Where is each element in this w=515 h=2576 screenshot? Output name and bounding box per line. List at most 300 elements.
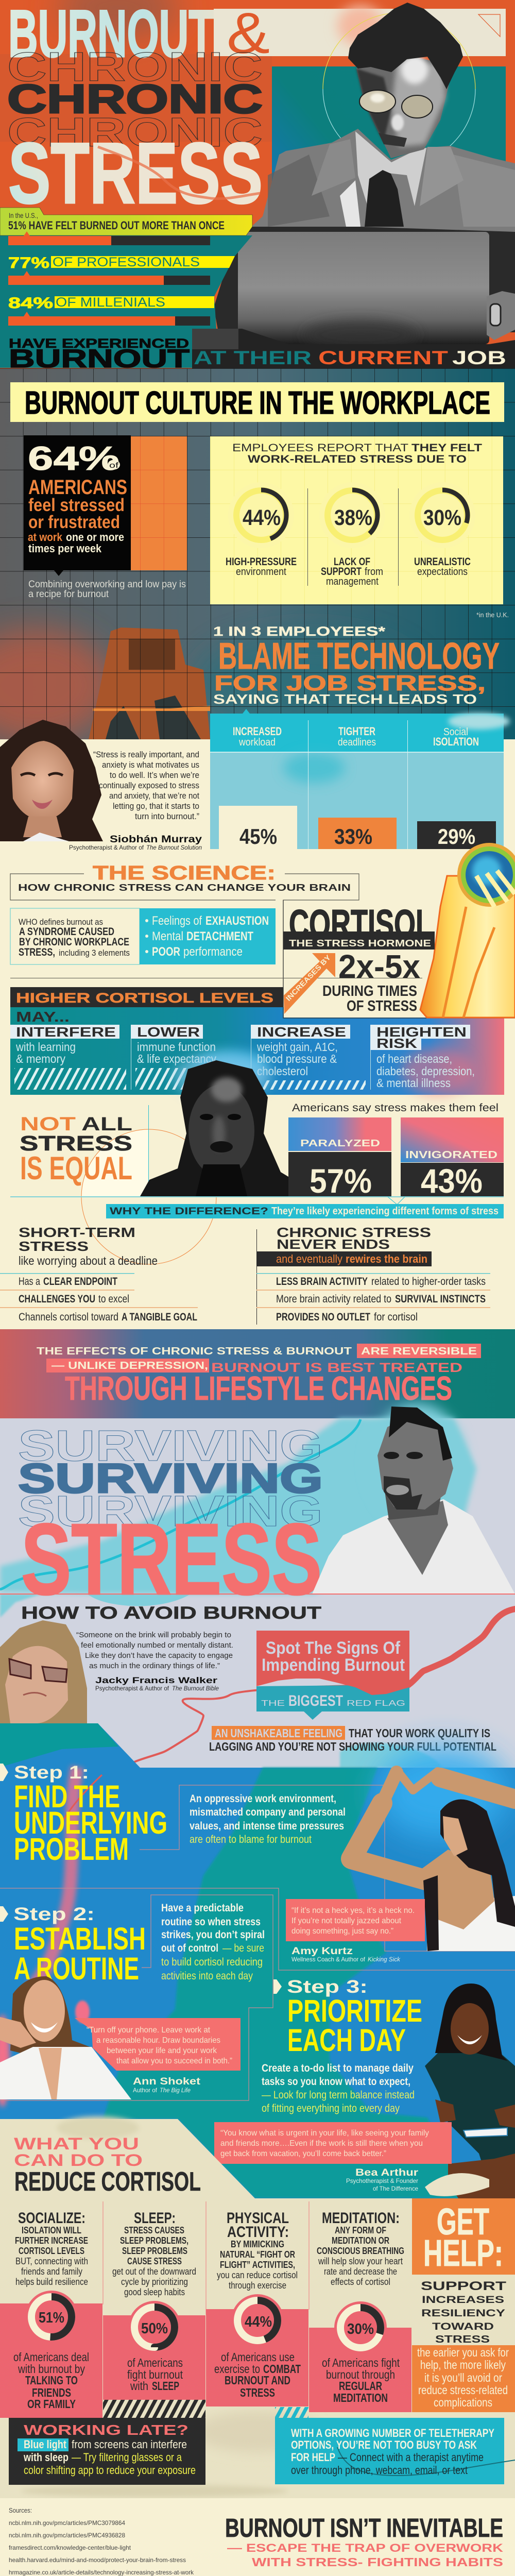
bar 77 percent: [8, 271, 210, 285]
panel: higher cortisol levels: HIGHER CORTISOL LEVELS: [16, 990, 273, 1006]
panel: higher cortisol levels: MAY...: [16, 1009, 70, 1025]
label social isolation: ISOLATION: [433, 735, 479, 748]
column: sleep: STRESS CAUSES: [124, 2225, 184, 2235]
laptop: [238, 232, 489, 344]
panel: steps: [0, 1723, 515, 2198]
shirt: [355, 131, 426, 216]
hair: [348, 3, 463, 89]
label increased workload: workload: [238, 737, 276, 748]
column: sleep: fight burnout: [127, 2368, 183, 2381]
panel: teletherapy: FOR HELP: [291, 2451, 335, 2464]
quote: Ann Shoket: between your life and your work: [107, 2046, 217, 2055]
chronic stress never ends: NEVER ENDS: [277, 1236, 390, 1252]
interfere: INTERFERE: [16, 1024, 116, 1040]
stat invigorated: 43%: [421, 1162, 483, 1200]
label lack of support: LACK OF: [334, 556, 370, 568]
stat tab: [0, 208, 252, 235]
panel: work-related stress: WORK-RELATED STRESS DUE TO: [248, 453, 467, 465]
column: socialize: SOCIALIZE:: [18, 2210, 85, 2227]
label unrealistic: UNREALISTIC: [414, 556, 471, 568]
column: physical activity: ACTIVITY:: [227, 2224, 289, 2241]
photo: Siobhan Murray: [0, 720, 103, 841]
short-term stress: CHALLENGES YOU: [19, 1293, 95, 1305]
column: meditation: will help slow your heart: [318, 2256, 403, 2266]
photo: man with laptop: [214, 3, 515, 350]
column: meditation: burnout through: [326, 2368, 395, 2381]
column: socialize: TALKING TO: [25, 2374, 78, 2387]
column: sleep: good sleep habits: [124, 2287, 185, 2297]
panel: work-related stress: THEY FELT: [411, 442, 482, 454]
closing headline: — ESCAPE THE TRAP OF OVERWORK: [227, 2541, 503, 2554]
during times of stress: OF STRESS: [347, 998, 417, 1014]
quote: Siobhan Murray: letting go, that it starts to: [113, 802, 199, 811]
column: socialize: with burnout by: [18, 2362, 85, 2376]
building reflection: [89, 628, 210, 739]
white strip: [340, 180, 360, 227]
quote: Amy Kurtz: doing something, just say no.”: [291, 1927, 393, 1936]
step 2: [0, 1902, 265, 1986]
during times of stress: [322, 983, 417, 1014]
quote: Siobhan Murray: anxiety is what motivates us: [102, 760, 199, 770]
surviving outline: SURVIVING: [18, 1421, 323, 1470]
at their current job: JOB: [452, 347, 506, 368]
heading: NOT: [20, 1113, 76, 1134]
bullets: performance: [183, 945, 243, 959]
sources list: ncbi.nlm.nih.gov/pmc/articles/PMC3079864: [9, 2519, 125, 2527]
quote: Jacky Francis Walker: [76, 1631, 233, 1692]
bar 29 percent: 29%: [438, 824, 475, 849]
heighten risk: [370, 1024, 475, 1090]
stat 84 percent: [8, 295, 214, 312]
connector lines: [0, 1785, 515, 2100]
label high-pressure: HIGH-PRESSURE: [226, 556, 297, 568]
sources list: ncbi.nlm.nih.gov/pmc/articles/PMC4936828: [9, 2532, 125, 2539]
stress: STRESS: [21, 1503, 322, 1616]
chronic stress never ends: CHRONIC STRESS: [277, 1225, 431, 1240]
teal panel: [272, 66, 506, 195]
column: socialize: CORTISOL LEVELS: [19, 2246, 84, 2256]
lower: & life expectancy: [137, 1052, 216, 1065]
chronic stress never ends: LESS BRAIN ACTIVITY: [276, 1276, 368, 1287]
column: physical activity: PHYSICAL: [227, 2210, 289, 2227]
quote: Jacky Francis Walker: The Burnout Bible: [172, 1685, 219, 1692]
quote: Ann Shoket: Author of: [133, 2087, 158, 2094]
column: sleep: 50%: [141, 2320, 168, 2337]
heighten risk: RISK: [376, 1036, 417, 1051]
quote: Ann Shoket: [75, 2018, 241, 2094]
panel: higher cortisol levels: [10, 987, 504, 1095]
watercolor blobs: [0, 1418, 476, 1594]
panel: hero: [0, 0, 515, 373]
bar 33 percent: [318, 818, 397, 849]
column: get help: TOWARD: [432, 2321, 494, 2332]
panel: 64 percent: of: [109, 461, 119, 470]
quote: Siobhan Murray: “Stress is really important, and: [93, 750, 199, 759]
step 2: A ROUTINE: [14, 1951, 139, 1986]
column: get help: complications: [434, 2396, 492, 2409]
pink rule: [0, 1594, 515, 1595]
circle ornament: [81, 1129, 149, 1197]
column: get help: INCREASES: [422, 2295, 504, 2306]
panel: WHO definition: WHO defines burnout as: [19, 917, 103, 927]
bullets: EXHAUSTION: [205, 914, 269, 928]
bullets: Mental: [152, 929, 183, 943]
section: cream background: [0, 739, 515, 1329]
short-term stress: like worrying about a deadline: [19, 1254, 158, 1267]
stat invigorated: [401, 1117, 504, 1200]
heading: the science: HOW CHRONIC STRESS CAN CHANGE YOUR BRAIN: [18, 883, 351, 893]
panel: effects reversible: ARE REVERSIBLE: [361, 1346, 477, 1357]
quote: Siobhan Murray: [69, 750, 202, 851]
step 1: are often to blame for burnout: [190, 1834, 312, 1845]
step 3: [262, 1977, 422, 2114]
increase: INCREASE: [257, 1024, 346, 1040]
during times of stress: DURING TIMES: [322, 983, 417, 999]
label tighter deadlines: [338, 725, 376, 748]
short-term stress: to excel: [98, 1293, 129, 1305]
bullets: DETACHMENT: [186, 929, 253, 943]
2x-5x: 2x-5x: [338, 948, 420, 985]
step 1: PROBLEM: [14, 1832, 129, 1867]
label high-pressure: [226, 556, 297, 578]
column: get help: [412, 2198, 515, 2412]
chronic stress never ends: for cortisol: [374, 1311, 418, 1323]
step 2: Have a predictable: [161, 1902, 244, 1914]
raised arms: [351, 1770, 515, 1880]
hatch marks: [14, 1068, 126, 1090]
quote: Siobhan Murray: to do well. It’s when we’re: [110, 771, 199, 780]
at their current job: [194, 347, 506, 368]
bullets: POOR: [152, 945, 180, 959]
lower: immune function: [137, 1040, 216, 1054]
column: meditation: MEDITATION: [333, 2391, 388, 2404]
stat paralyzed: 57%: [310, 1162, 372, 1200]
title: chronic outline: CHRONIC: [7, 44, 263, 90]
column: physical activity: exercise to: [214, 2362, 260, 2376]
short-term stress: Channels cortisol toward: [19, 1311, 118, 1323]
step 3: tasks so you know what to expect,: [262, 2076, 410, 2088]
panel: effects reversible: — UNLIKE DEPRESSION,: [52, 1360, 208, 1371]
step 2: out of control: [161, 1942, 218, 1954]
column: sleep: with: [130, 2379, 148, 2393]
quote: Ann Shoket: “Turn off your phone. Leave work at: [87, 2026, 211, 2035]
bar 33 percent: 33%: [334, 824, 372, 849]
panel: effects reversible: BURNOUT IS BEST TREATED: [211, 1361, 462, 1375]
column: meditation: REGULAR: [339, 2379, 382, 2393]
footnote: *in the U.K.: [476, 611, 509, 619]
step 1: UNDERLYING: [14, 1805, 167, 1840]
bar 45 percent: 45%: [239, 824, 277, 849]
callout: biggest red flag: RED FLAG: [347, 1699, 405, 1708]
panel: cortisol hormone: [10, 843, 515, 1018]
stat 77 percent: 77%: [8, 255, 49, 272]
column: physical activity: NATURAL “FIGHT OR: [220, 2249, 295, 2260]
column: socialize: FURTHER INCREASE: [15, 2235, 88, 2246]
panel: working late: Blue light: [24, 2438, 67, 2451]
caption: Combining overworking and low pay is: [28, 579, 186, 590]
stat 84 percent: OF MILLENIALS: [56, 295, 165, 310]
sources list: [8, 2506, 305, 2576]
interfere: [10, 1024, 119, 1065]
column: physical activity: you can reduce cortisol: [217, 2270, 298, 2280]
panel: 64 percent: at work: [28, 531, 63, 544]
quote: Bea Arthur: get back from vacation, you’ll come back better.”: [220, 2149, 386, 2158]
heading: how to avoid: HOW TO AVOID BURNOUT: [21, 1603, 321, 1623]
heading: [20, 1113, 132, 1187]
panel: 64 percent: times per week: [28, 542, 102, 555]
column: get help: SUPPORT: [421, 2279, 506, 2293]
chronic stress never ends: PROVIDES NO OUTLET: [276, 1311, 370, 1323]
heading: blame technology: [213, 624, 500, 707]
label tighter deadlines: deadlines: [338, 737, 376, 748]
short-term stress: Has a: [19, 1276, 40, 1287]
arrow: increases by: INCREASES BY: [284, 953, 333, 1003]
quote: Jacky Francis Walker: Like they don’t have the capacity to engage: [85, 1651, 233, 1660]
face: [443, 1816, 468, 1856]
photo: man in white shirt: [312, 1404, 515, 1594]
column: sleep: CAUSE STRESS: [127, 2256, 182, 2266]
neck and face: [356, 57, 450, 158]
column: socialize: [0, 2210, 102, 2418]
column: meditation: ANY FORM OF: [335, 2225, 386, 2235]
teal rule: [10, 1196, 504, 1197]
panel: effects reversible: THE EFFECTS OF CHRONIC STRESS & BURNOUT: [37, 1346, 352, 1357]
column: sleep: SLEEP PROBLEMS,: [120, 2235, 188, 2246]
column: meditation: 30%: [347, 2321, 374, 2337]
quote: Bea Arthur: and friends more….Even if the work is still there when you: [220, 2139, 423, 2148]
heighten risk: of heart disease,: [376, 1052, 452, 1065]
stats panel background: [0, 235, 252, 368]
column: sleep: get out of the downward: [112, 2266, 196, 2277]
title: chronic outline: CHRONIC: [7, 109, 263, 155]
donut 30: [409, 482, 475, 548]
step 1: mismatched company and personal: [190, 1806, 346, 1818]
quote: Bea Arthur: of The Difference: [373, 2185, 418, 2192]
short-term stress: [0, 1225, 198, 1323]
label lack of support: from: [365, 566, 383, 578]
cortisol word: CORTISOL: [289, 901, 433, 946]
callout: biggest red flag: THE: [261, 1699, 285, 1708]
donut 30: 30%: [423, 505, 461, 530]
sources list: hrmagazine.co.uk/article-details/technology-increasing-stress-at-work: [9, 2569, 194, 2576]
column: socialize: friends and family: [21, 2266, 82, 2277]
photo: Ann Shoket: [0, 1976, 131, 2099]
bar 29 percent: [417, 821, 496, 849]
stat invigorated: INVIGORATED: [405, 1149, 497, 1161]
panel: work-related stress: [210, 436, 503, 604]
increase: weight gain, A1C,: [256, 1040, 338, 1054]
why the difference: WHY THE DIFFERENCE?: [110, 1206, 268, 1217]
column: physical activity: [206, 2210, 308, 2406]
step 2: activities into each day: [161, 1970, 253, 1982]
callout: biggest red flag: [256, 1631, 409, 1720]
panel: WHO definition: [10, 908, 276, 964]
label increased workload: INCREASED: [233, 725, 282, 738]
red flag statement: AN UNSHAKEABLE FEELING: [215, 1726, 342, 1740]
surviving solid: SURVIVING: [18, 1455, 323, 1502]
quote: Amy Kurtz: Kicking Sick: [368, 1956, 401, 1963]
lapels: [312, 139, 355, 196]
column: sleep: cycle by prioritizing: [121, 2277, 188, 2287]
step 1: An oppressive work environment,: [190, 1793, 336, 1805]
heading: CAN DO TO: [14, 2151, 143, 2170]
at their current job: AT THEIR: [194, 347, 312, 368]
column: get help: STRESS: [435, 2334, 490, 2345]
donut 38: 38%: [334, 505, 372, 530]
column: socialize: ISOLATION WILL: [22, 2225, 81, 2235]
column: meditation: [309, 2210, 411, 2412]
grid background: [0, 368, 515, 739]
column: get help: GET: [437, 2201, 489, 2243]
quote: Ann Shoket: that allow you to succeed in both.”: [116, 2057, 232, 2065]
quote: Bea Arthur: “You know what is urgent in your life, like seeing your family: [220, 2129, 429, 2138]
heading: blame technology: SAYING THAT TECH LEADS TO: [213, 691, 477, 707]
quote: Jacky Francis Walker: as much in the ordinary things of life.”: [89, 1662, 220, 1670]
sources list: health.harvard.edu/mind-and-mood/protect-your-brain-from-stress: [9, 2556, 186, 2564]
column: physical activity: through exercise: [229, 2280, 286, 2291]
cream band: [214, 9, 506, 56]
column: socialize: of Americans deal: [13, 2350, 89, 2364]
quote: Amy Kurtz: If you’re not totally jazzed about: [291, 1917, 402, 1925]
short-term stress: SHORT-TERM: [19, 1225, 135, 1240]
chronic stress never ends: related to higher-order tasks: [371, 1276, 486, 1287]
heading: blame technology: FOR JOB STRESS,: [214, 671, 486, 695]
short-term stress: A TANGIBLE GOAL: [122, 1311, 197, 1323]
panel: 64 percent: AMERICANS: [28, 476, 127, 499]
chronic stress never ends: rewires the brain: [346, 1252, 427, 1265]
illustration: brain and hands: [420, 843, 515, 1018]
callout: biggest red flag: BIGGEST: [288, 1692, 343, 1709]
panel: WHO definition: A SYNDROME CAUSED: [19, 926, 114, 938]
donut 38: [319, 482, 385, 548]
quote: Jacky Francis Walker: feel emotionally numbed or mentally distant.: [81, 1641, 233, 1650]
title box: [10, 382, 504, 422]
heading: REDUCE CORTISOL: [14, 2167, 201, 2197]
why the difference: [106, 1197, 504, 1218]
quote: Siobhan Murray: turn into burnout.”: [135, 812, 199, 821]
panel: 64 percent: feel stressed: [28, 495, 125, 515]
panel: not all stress is equal: [0, 1054, 504, 1325]
callout: biggest red flag: Impending Burnout: [262, 1655, 405, 1675]
caption: a recipe for burnout: [28, 589, 109, 600]
title: chronic solid: CHRONIC: [7, 76, 263, 122]
step 1: [0, 1762, 346, 1867]
callout: biggest red flag: Spot The Signs Of: [266, 1638, 401, 1658]
label lack of support: management: [326, 576, 379, 587]
bullets: [145, 914, 269, 959]
heighten risk: HEIGHTEN: [376, 1024, 467, 1040]
stress hormone label: THE STRESS HORMONE: [289, 938, 431, 948]
step 3: of fitting everything into every day: [262, 2103, 400, 2114]
donut 44: [228, 482, 294, 548]
heading: the science: [10, 862, 515, 1018]
column: socialize: FRIENDS: [32, 2386, 71, 2399]
short-term stress: STRESS: [19, 1239, 89, 1254]
step 3: — Look for long term balance instead: [262, 2089, 415, 2101]
panel: surviving stress and avoiding burnout: [0, 1404, 515, 1775]
column: meditation: of Americans fight: [322, 2356, 400, 2369]
title: stress: STRESS: [8, 125, 263, 222]
heading: the science: THE SCIENCE:: [93, 862, 276, 884]
red flag statement: [209, 1726, 496, 1753]
column: socialize: OR FAMILY: [27, 2397, 76, 2411]
chronic stress never ends: and eventually: [276, 1252, 342, 1265]
quote: Bea Arthur: [214, 2122, 452, 2192]
column: physical activity: 44%: [245, 2314, 272, 2330]
label increased workload: [233, 725, 282, 748]
step 1: FIND THE: [14, 1779, 120, 1814]
hatch bands: [103, 2400, 205, 2418]
closing headline: [225, 2513, 503, 2569]
stat paralyzed: [288, 1117, 391, 1200]
panel: 64 percent: [24, 435, 187, 576]
bar 45 percent: [219, 806, 297, 849]
panel: working late: color shifting app to reduce your exposure: [24, 2464, 196, 2477]
bar 51 percent: [8, 231, 210, 245]
column: physical activity: BY MIMICKING: [231, 2239, 284, 2249]
column: sleep: SLEEP: [152, 2379, 179, 2393]
step 1: values, and intense time pressures: [190, 1820, 344, 1832]
stat note: In the U.S.,: [9, 211, 38, 219]
increase: [251, 1024, 350, 1078]
chronic stress never ends: [256, 1225, 490, 1325]
arrow: increases by: [284, 953, 335, 1014]
column: physical activity: STRESS: [240, 2386, 275, 2399]
triangle ornament: [478, 14, 500, 37]
column: get help: RESILIENCY: [421, 2308, 505, 2319]
step 3: PRIORITIZE: [287, 1993, 422, 2028]
panel: teletherapy: — Connect with a therapist anytime: [338, 2451, 484, 2464]
ornament circle: [323, 13, 475, 89]
label high-pressure: environment: [236, 566, 286, 578]
lower: LOWER: [137, 1024, 200, 1040]
panel: reduce cortisol: [0, 2116, 515, 2498]
panel: WHO definition: BY CHRONIC WORKPLACE: [19, 936, 129, 948]
column: sleep: of Americans: [127, 2356, 183, 2369]
label lack of support: SUPPORT: [321, 566, 362, 578]
step 3: Create a to-do list to manage daily: [262, 2062, 414, 2074]
panel: WHO definition: including 3 elements: [59, 948, 130, 958]
panel: working late: [9, 2418, 205, 2485]
chart: tech leads to: [210, 709, 510, 849]
step 2: to build cortisol reducing: [161, 1956, 263, 1968]
photo: Amy Kurtz: [351, 1770, 515, 1951]
chronic stress never ends: More brain activity related to: [276, 1293, 391, 1305]
label unrealistic: expectations: [417, 566, 468, 578]
step 2: strikes, you don’t spiral: [161, 1929, 265, 1941]
stat 77 percent: [8, 255, 235, 272]
photo: Bea Arthur: [425, 1984, 515, 2198]
heading: [14, 2134, 201, 2197]
panel: working late: with sleep: [23, 2451, 68, 2464]
quote: Siobhan Murray: continually exposed to stress: [99, 781, 199, 790]
quote: Siobhan Murray: The Burnout Solution: [146, 844, 202, 851]
panel: working late: — Try filtering glasses or a: [72, 2451, 182, 2464]
heighten risk: diabetes, depression,: [376, 1064, 475, 1078]
step 1: Step 1:: [14, 1762, 89, 1783]
column: meditation: CONSCIOUS BREATHING: [317, 2246, 404, 2256]
interfere: & memory: [16, 1052, 65, 1065]
panel: 64 percent: or frustrated: [28, 512, 120, 532]
quote: Siobhan Murray: Siobhán Murray: [110, 834, 202, 845]
dark strip: [192, 329, 515, 368]
sources list: framesdirect.com/knowledge-center/blue-light: [9, 2544, 131, 2551]
panel: working late: from screens can interfere: [72, 2438, 187, 2451]
panel: teletherapy: over through phone, webcam, email, or text: [291, 2464, 468, 2477]
closing headline: WITH STRESS- FIGHTING HABITS: [252, 2555, 503, 2569]
quote: Ann Shoket: The Big Life: [160, 2087, 191, 2094]
quote: Bea Arthur: Psychotherapist & Founder: [346, 2177, 418, 2184]
